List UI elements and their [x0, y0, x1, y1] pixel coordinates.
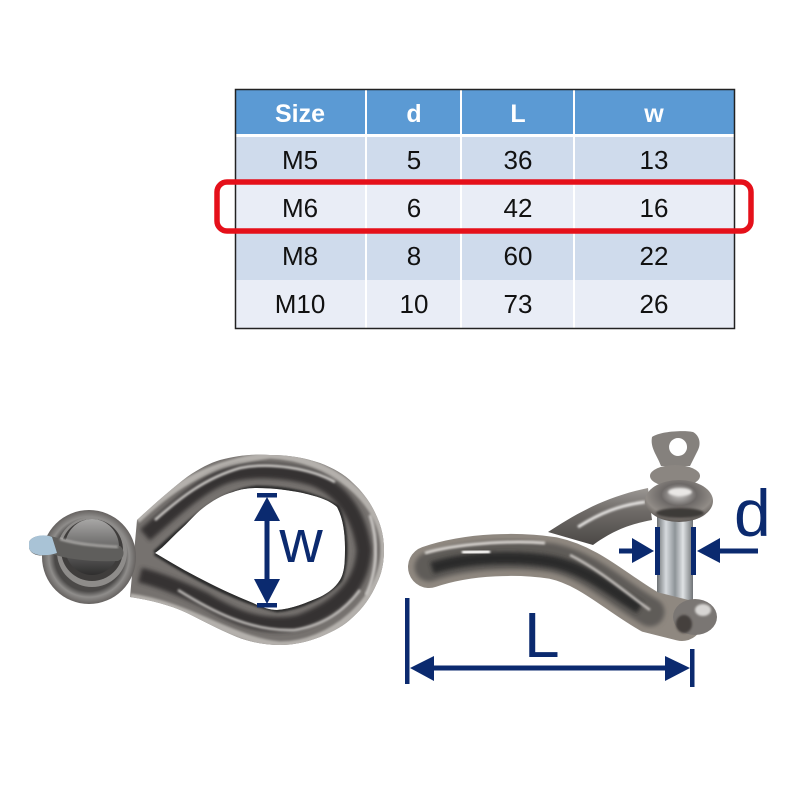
shackle loop — [130, 454, 384, 645]
label: L: L — [524, 599, 560, 671]
red highlight around M6 row — [217, 182, 751, 231]
label: w: w — [278, 508, 323, 575]
table row M8: M8 — [282, 241, 318, 271]
label: d: d — [734, 476, 771, 550]
twisted body — [425, 542, 682, 620]
photo: shackle side view — [425, 431, 717, 635]
size table — [236, 90, 734, 328]
upper ball — [645, 480, 713, 522]
table row M10 — [236, 280, 734, 328]
table row M6: 16 — [640, 193, 668, 223]
table row M5: 5 — [407, 145, 421, 175]
table row M5 — [236, 137, 734, 184]
table row M6 — [236, 184, 734, 232]
shackle pin tab — [29, 535, 124, 561]
table row M5: M5 — [282, 145, 318, 175]
table row M6: 6 — [407, 193, 421, 223]
table row M6: 42 — [504, 193, 532, 223]
pin tab with eye — [652, 431, 700, 466]
lower ball — [673, 599, 717, 635]
table header row — [236, 90, 734, 134]
dimension arrow: d — [619, 527, 758, 575]
table header row: d — [406, 100, 422, 128]
table row M6: M6 — [282, 193, 318, 223]
table header row: w — [643, 100, 664, 128]
collar — [650, 465, 700, 487]
table row M10: 10 — [400, 289, 428, 319]
photo: shackle front view — [29, 454, 384, 645]
table row M8: 22 — [640, 241, 668, 271]
infographic canvas — [29, 88, 766, 687]
table row M10: 73 — [504, 289, 532, 319]
table header row: Size — [275, 100, 325, 128]
table row M5: 13 — [640, 145, 668, 175]
pin — [657, 512, 693, 602]
table row M8: 8 — [407, 241, 421, 271]
dimension arrow: L — [405, 598, 694, 687]
dimension arrow: w — [254, 493, 280, 608]
table header row: L — [510, 100, 526, 128]
table row M8 — [236, 232, 734, 280]
shackle pin head ball — [42, 510, 136, 604]
table row M10: 26 — [640, 289, 668, 319]
table row M5: 36 — [504, 145, 532, 175]
upper arm — [548, 488, 652, 545]
table row M8: 60 — [504, 241, 532, 271]
table row M10: M10 — [275, 289, 325, 319]
